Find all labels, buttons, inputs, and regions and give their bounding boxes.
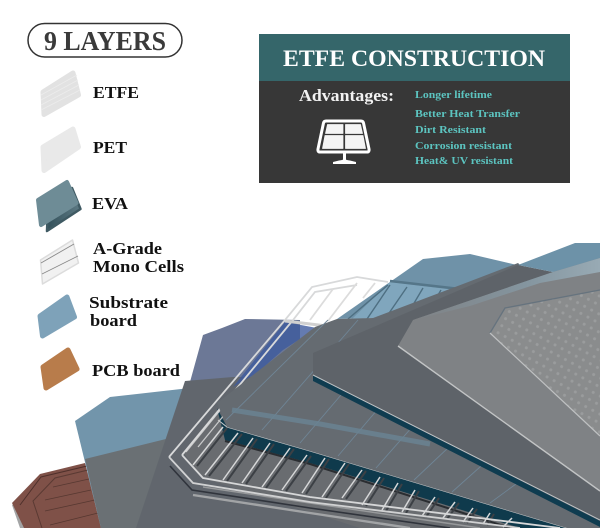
legend: ETFE: ETFE <box>93 83 139 102</box>
layer: A-grade mono cell frame <box>169 277 567 528</box>
legend: A-Grade Mono Cells: A-Grade <box>93 239 162 258</box>
legend: substrate board <box>40 293 168 336</box>
advantages list <box>415 89 520 167</box>
advantages list: Corrosion resistant <box>415 140 512 152</box>
legend: ETFE <box>41 73 139 114</box>
panel header <box>259 34 570 81</box>
layer: ETFE textured sheet <box>490 290 600 436</box>
panel header: ETFE CONSTRUCTION <box>283 46 545 71</box>
legend: PET <box>43 129 128 170</box>
exploded panel illustration <box>12 243 600 528</box>
legend: substrate board: board <box>90 311 138 330</box>
icon: solar panel <box>318 121 369 164</box>
advantages list: Dirt Resistant <box>415 124 486 136</box>
advantages heading: Advantages: <box>299 86 394 105</box>
advantages list: Better Heat Transfer <box>415 108 520 120</box>
layer: PCB board <box>12 463 110 528</box>
legend: PCB board <box>43 350 181 388</box>
heading: 9 layers pill: 9 LAYERS <box>44 26 166 56</box>
legend: EVA <box>38 182 129 231</box>
layer: tinted glass sheet with cell grid <box>217 263 600 528</box>
legend: substrate board: Substrate <box>89 293 168 312</box>
layer: dark EVA sheet <box>313 243 600 527</box>
layer: PET sheet <box>398 258 600 491</box>
legend: PCB board: PCB board <box>92 361 181 380</box>
advantages list: Longer lifetime <box>415 89 492 101</box>
panel body <box>259 81 570 183</box>
layer: blue backsheet <box>337 254 517 319</box>
legend: A-Grade Mono Cells: Mono Cells <box>93 257 184 276</box>
legend: PET: PET <box>93 138 128 157</box>
layer: encapsulant sheet <box>136 319 600 528</box>
legend: A-Grade Mono Cells <box>40 239 184 284</box>
panel: ETFE construction <box>259 34 570 183</box>
legend: EVA: EVA <box>92 194 129 213</box>
layer: substrate board <box>75 388 190 528</box>
advantages list: Heat& UV resistant <box>415 155 513 167</box>
